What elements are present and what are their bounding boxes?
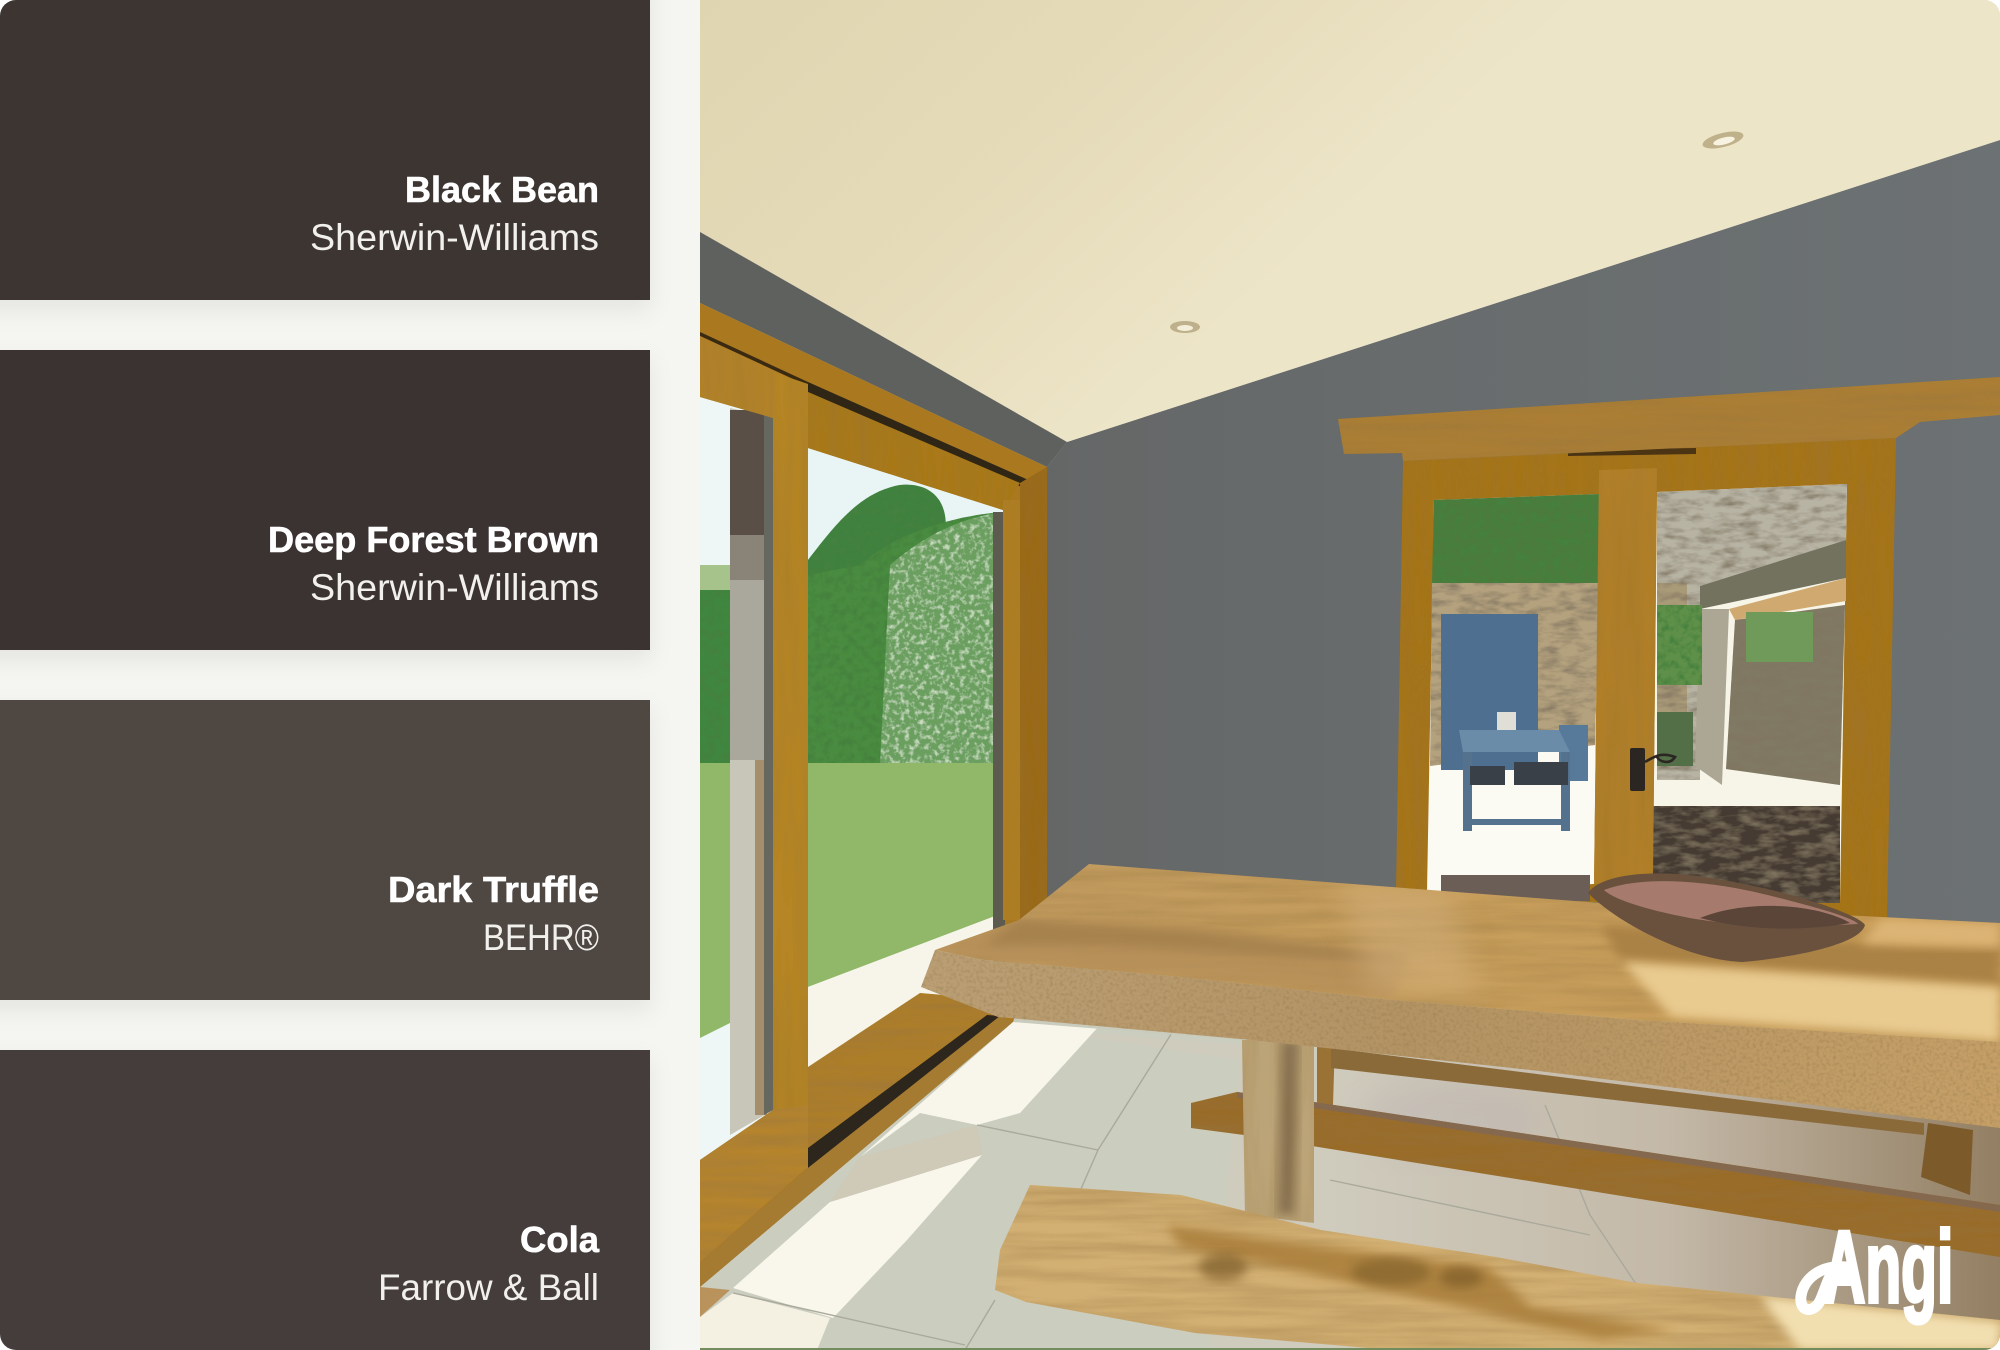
panel: Black Bean swatch [0,0,650,300]
table top [921,864,2000,1128]
door lower rail [700,1105,808,1262]
brand: Farrow & Ball: Farrow & Ball [378,1267,599,1308]
top slot vent [1568,448,1696,456]
wooden bowl [1588,873,1865,962]
dark sliding track [808,1015,1000,1168]
top outer strip highlights and track [808,382,1033,492]
fixed pane lower rail [808,993,1003,1148]
sill [700,1016,1013,1287]
color name: Dark Truffle: Dark Truffle [388,869,599,910]
panel: Cola swatch [0,1050,650,1350]
table surface light and shade [935,880,2000,1042]
far door frame [1396,438,1896,920]
bench grain and knots [1167,1225,2000,1350]
panel: Dark Truffle swatch [0,700,650,1000]
panel: Deep Forest Brown swatch [0,350,650,650]
bottom edge strip [700,1348,2000,1350]
color name: Cola: Cola [520,1219,600,1260]
brand: Sherwin-Williams: Sherwin-Williams [310,567,599,608]
view through sliding door pane [700,397,773,1160]
view through fixed window pane [808,448,1005,1067]
left door pane view [1427,494,1599,901]
right door pane view [1653,484,1847,903]
bench [995,1185,2000,1350]
left wall strip [700,232,1067,467]
left window frame [700,303,1047,1287]
color name: Black Bean: Black Bean [405,169,599,210]
door center mullion [1594,468,1657,884]
ceiling lights [1170,128,1745,333]
window stiles and jambs [773,372,808,1182]
fixed pane top rail [808,392,1020,510]
right wall [1047,140,2000,1000]
brand: BEHR: BEHR® [483,917,599,958]
floor [700,1020,2000,1350]
table legs and stretchers [1191,1040,2000,1257]
ceiling [700,0,2000,442]
photo: dining room with dark gray walls [700,0,2000,1350]
sliding door top rail [700,336,792,418]
door handle [1630,748,1675,791]
brand: Sherwin-Williams: Sherwin-Williams [310,217,599,258]
logo: Angi: Angi [1823,1210,1953,1324]
color name: Deep Forest Brown: Deep Forest Brown [268,519,599,560]
lintel beam [1338,377,2000,461]
